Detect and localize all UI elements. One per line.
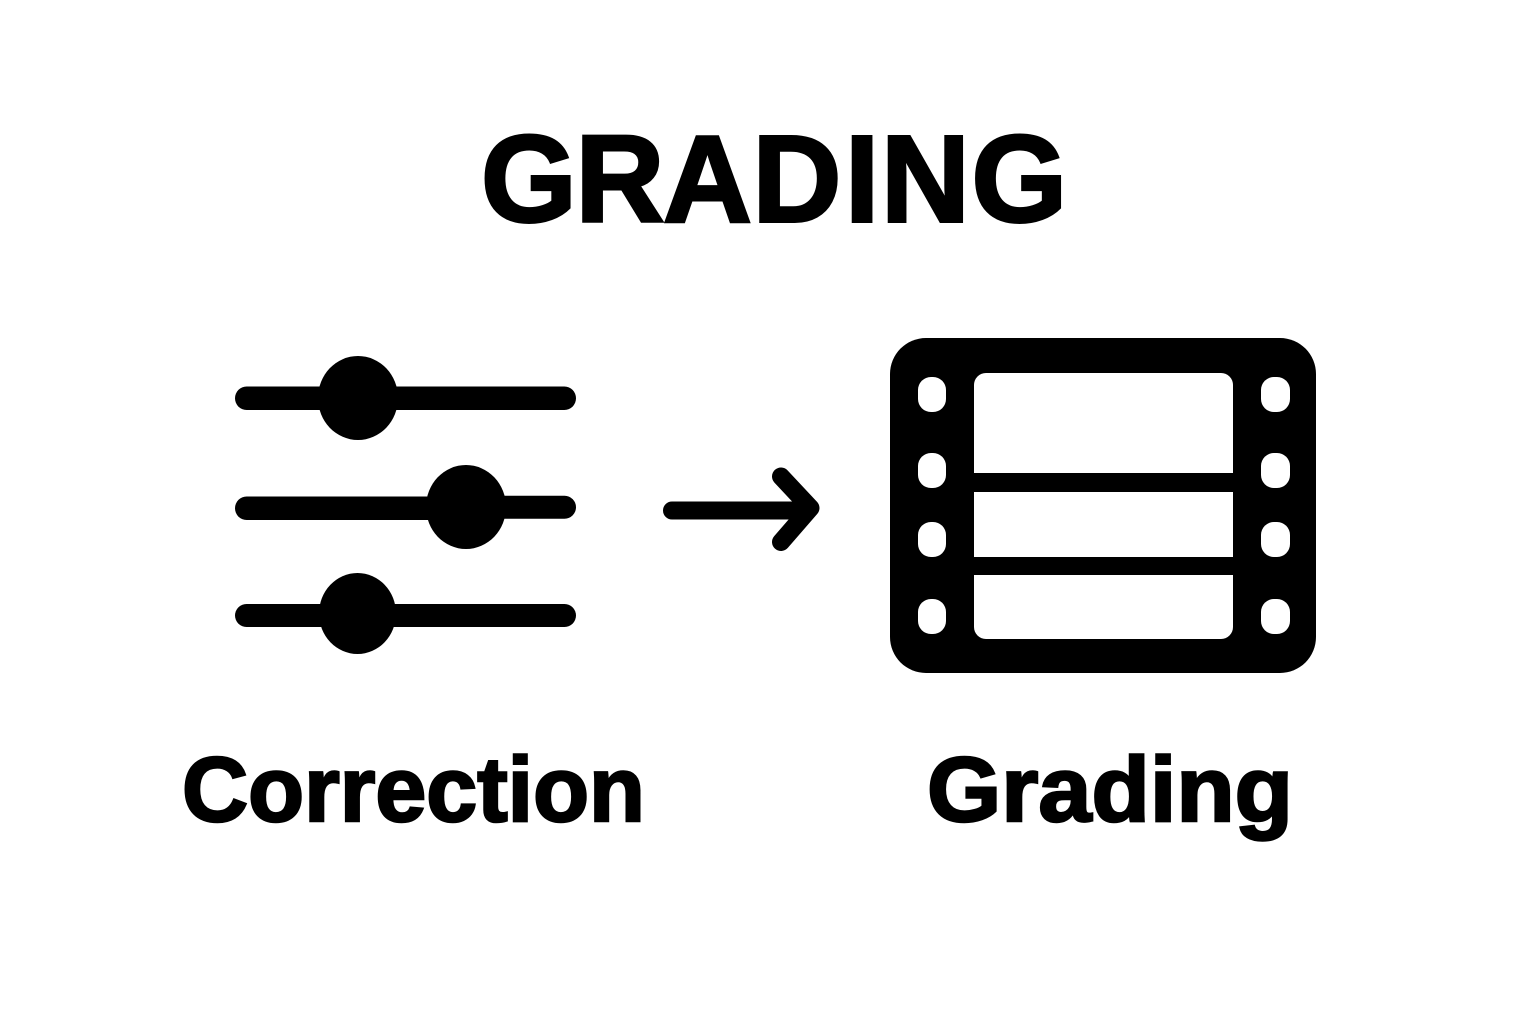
title: GRADING [481, 112, 1067, 248]
film frames [974, 373, 1233, 639]
arrow: correction to grading [672, 476, 810, 542]
left sprocket holes [918, 377, 946, 634]
label: correction: Correction [182, 739, 645, 841]
icon: correction sliders [235, 356, 576, 654]
label: grading: Grading [927, 739, 1293, 841]
right sprocket holes [1261, 377, 1290, 634]
icon: film strip [890, 338, 1316, 673]
